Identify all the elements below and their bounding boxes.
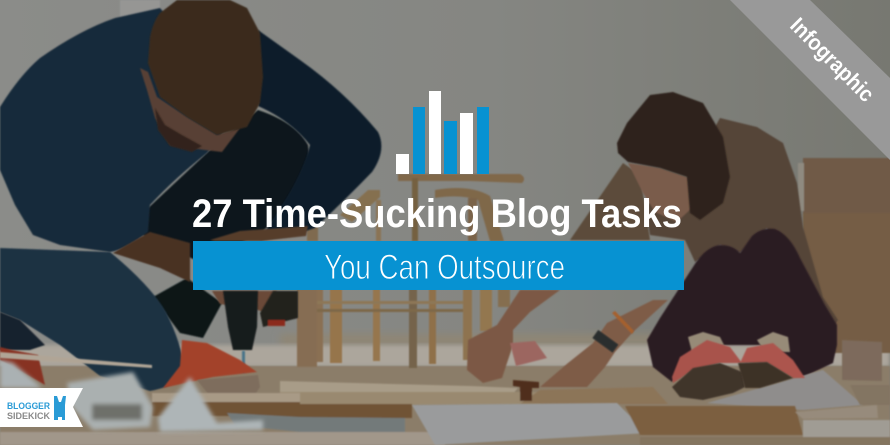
woman: left sleeve: [570, 163, 650, 240]
man: navy sleeve: [258, 30, 381, 240]
woman: face: [628, 163, 695, 222]
woman: forearm and hand: [540, 300, 668, 387]
photo: work boards: [0, 375, 668, 445]
woman: pink slipper behind: [510, 341, 547, 366]
corner ribbon: [730, 0, 890, 160]
logo wordmark: BLOGGER: [7, 401, 50, 412]
photo: wooden stools: [297, 174, 524, 368]
woman: bracelet: [612, 311, 634, 334]
man: hand on thigh: [210, 226, 308, 241]
man: dark jeans thigh: [130, 110, 309, 262]
photo: plastic bags: [0, 360, 263, 432]
man: denim lower leg: [0, 248, 184, 391]
man: hand on drill: [212, 291, 277, 313]
woman: right sole: [738, 362, 793, 388]
icon: bunny: [54, 396, 66, 420]
photo: floor items: [0, 340, 890, 445]
man: far leg: [153, 278, 222, 338]
woman: hair: [617, 92, 730, 220]
woman: left sole: [672, 363, 745, 400]
man: beard: [155, 108, 202, 152]
woman: right slipper: [740, 343, 805, 378]
man: navy sweater body: [0, 8, 240, 252]
woman: pillow paper: [707, 370, 863, 410]
bar chart icon: [396, 91, 489, 174]
woman: left slipper: [672, 340, 742, 383]
man: red slipper: [163, 340, 257, 388]
woman: socks: [688, 332, 790, 352]
logo flag: [0, 388, 83, 427]
woman: watch: [592, 330, 618, 353]
photo: cardboard boxes: [798, 158, 890, 353]
woman: near hand and arm: [467, 290, 560, 383]
ribbon label: Infographic: [785, 13, 879, 107]
man: hair: [148, 0, 263, 135]
logo wordmark: [7, 401, 50, 422]
man: drill: [223, 291, 298, 373]
woman: dark trousers: [647, 229, 837, 382]
man: ear and face: [140, 68, 240, 152]
title: 27 Time-Sucking Blog Tasks: [192, 192, 682, 236]
photo: woman assembling furniture: [467, 92, 863, 410]
subtitle banner: [193, 241, 684, 290]
man: forearm: [113, 232, 190, 282]
subtitle text: You Can Outsource: [324, 248, 565, 287]
photo: man assembling furniture: [0, 0, 381, 391]
man: shadowed calf: [0, 312, 45, 350]
logo wordmark: SIDEKICK: [7, 411, 50, 422]
man: back slipper: [0, 347, 45, 385]
woman: sweater: [645, 118, 838, 340]
